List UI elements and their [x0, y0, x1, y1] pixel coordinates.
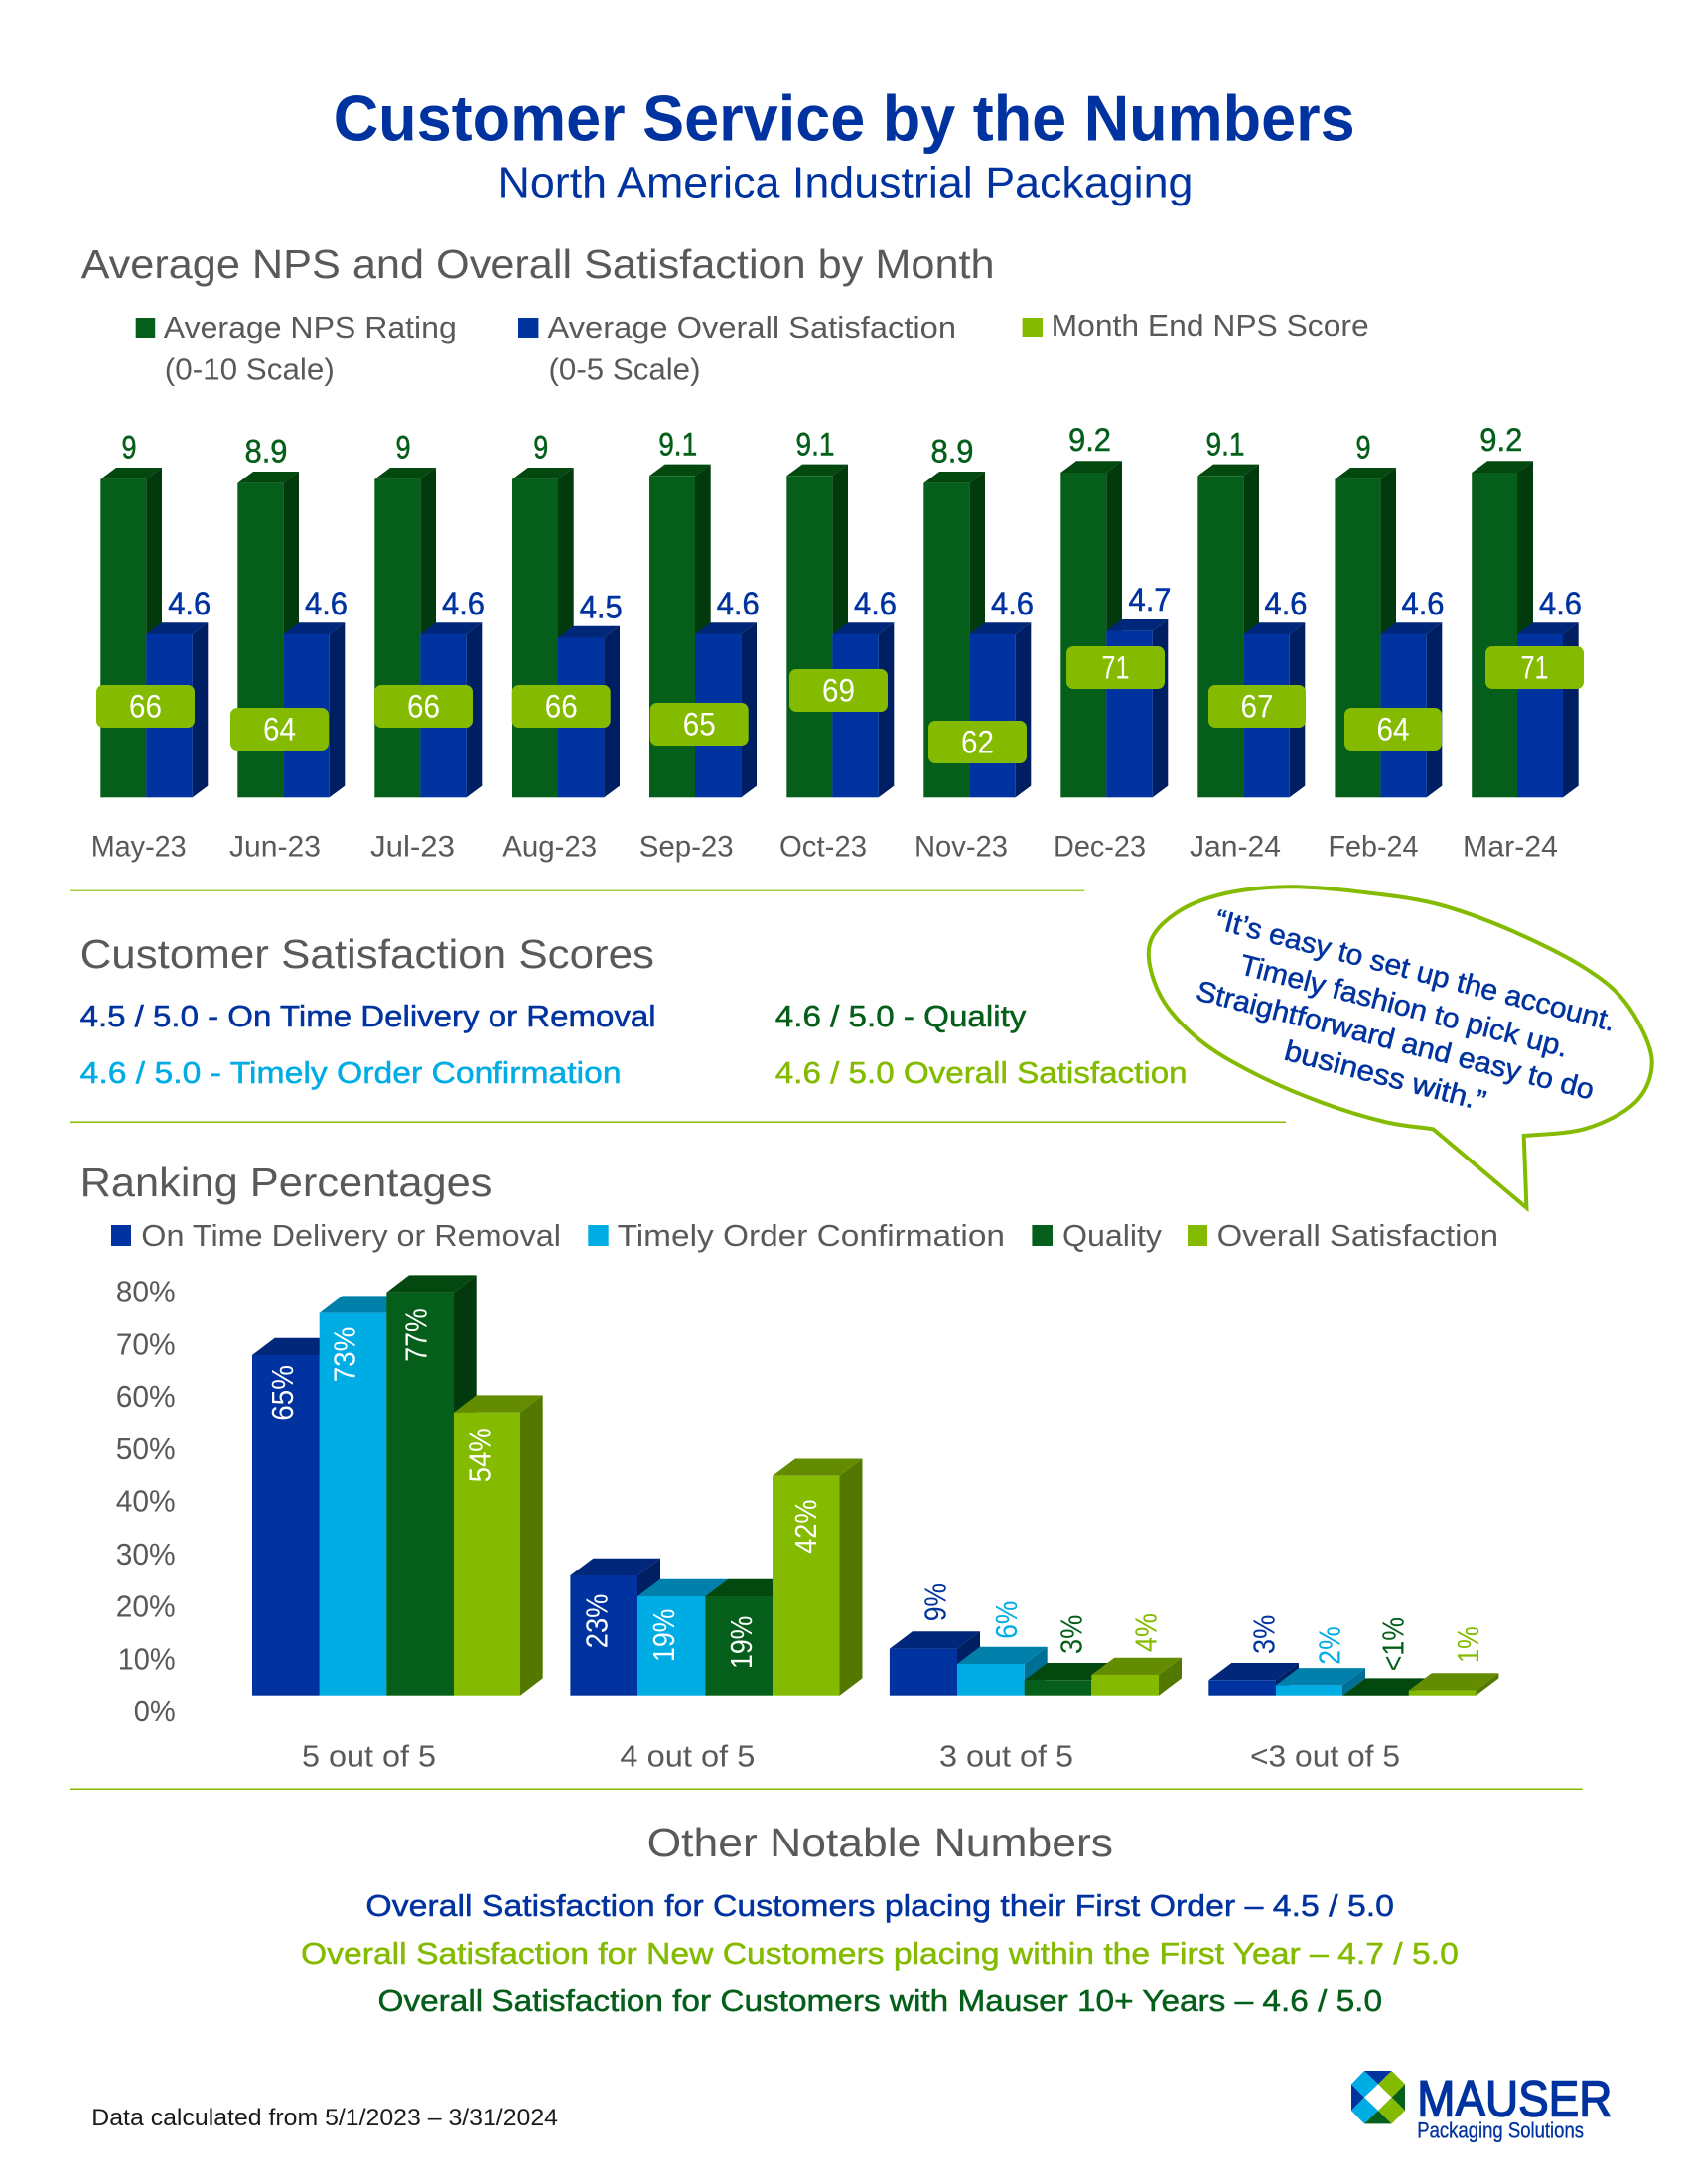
- month group: Sep-23: 9.1: [658, 426, 697, 462]
- bar group: less than 3 out of 5: 1%: [1451, 1626, 1485, 1663]
- bar group: less than 3 out of 5: 2%: [1313, 1626, 1346, 1665]
- month group: Aug-23: 4.5: [580, 590, 623, 625]
- month group: Oct-23: 69: [822, 673, 855, 709]
- month group: Nov-23: 4.6: [991, 586, 1034, 621]
- bar group: 3 out of 5: 3 out of 5: [939, 1738, 1073, 1773]
- month group: Mar-24: 9.2: [1479, 422, 1522, 458]
- month group: Jan-24: 4.6: [1265, 586, 1307, 621]
- bar group: less than 3 out of 5: <1%: [1376, 1617, 1410, 1671]
- bar group: 5 out of 5: 65%: [265, 1365, 300, 1421]
- month group: May-23: May-23: [91, 831, 187, 864]
- stat: customers with Mauser 10+ years: Overall Satisfaction for Customers with Mauser 10+ Years – 4.6 / 5.0: [377, 1983, 1382, 2018]
- month group: Nov-23: 8.9: [931, 434, 973, 470]
- y axis labels: 30%: [116, 1537, 176, 1571]
- heading: customer satisfaction scores: Customer Satisfaction Scores: [80, 931, 654, 977]
- callout: customer quote speech bubble: [1149, 887, 1652, 1208]
- quote text: business with.”: [1281, 1035, 1489, 1118]
- month group: May-23: [91, 430, 211, 864]
- month group: May-23: 4.6: [168, 586, 211, 621]
- month group: Oct-23: Oct-23: [779, 831, 867, 864]
- month group: Nov-23: [914, 434, 1034, 864]
- month group: Feb-24: Feb-24: [1329, 831, 1418, 864]
- y axis labels: 20%: [116, 1589, 176, 1624]
- month group: Dec-23: 4.7: [1128, 582, 1172, 617]
- logo wordmark: MAUSER: [1417, 2071, 1612, 2127]
- month group: Dec-23: Dec-23: [1054, 831, 1146, 864]
- bar group: 3 out of 5: [890, 1583, 1182, 1773]
- month group: Jun-23: 64: [263, 712, 296, 748]
- month group: Jul-23: 66: [407, 689, 440, 725]
- month group: Mar-24: 4.6: [1539, 586, 1582, 621]
- subtitle: North America Industrial Packaging: [498, 158, 1194, 206]
- legend item: month end NPS score: Month End NPS Score: [1052, 308, 1369, 342]
- month group: Jul-23: Jul-23: [370, 831, 455, 864]
- month group: Jan-24: 9.1: [1205, 426, 1245, 462]
- quote text: “It’s easy to set up the account.: [1211, 904, 1618, 1038]
- month group: Jun-23: 8.9: [244, 434, 288, 470]
- stat: first order: Overall Satisfaction for Customers placing their First Order – 4.5 / 5.0: [365, 1888, 1394, 1923]
- panel: other notable numbers lines: [301, 1888, 1459, 2018]
- month group: Nov-23: Nov-23: [914, 831, 1008, 864]
- month group: Oct-23: 9.1: [796, 426, 834, 462]
- quote text: Timely fashion to pick up.: [1236, 949, 1572, 1064]
- month group: Mar-24: [1463, 422, 1584, 864]
- y axis labels: 60%: [116, 1379, 176, 1414]
- month group: Aug-23: 9: [533, 430, 548, 466]
- legend: monthly chart: [136, 308, 1369, 387]
- month group: Jan-24: 67: [1241, 689, 1273, 725]
- month group: Feb-24: 9: [1356, 430, 1370, 466]
- y axis labels: 80%: [116, 1275, 176, 1309]
- y axis labels: [116, 1275, 176, 1728]
- bar group: 4 out of 5: 4 out of 5: [620, 1738, 755, 1773]
- month group: Oct-23: [779, 426, 897, 864]
- month group: Dec-23: 71: [1102, 650, 1130, 686]
- bar group: 5 out of 5: 73%: [327, 1327, 361, 1382]
- month group: Jul-23: [370, 430, 485, 864]
- quote text: [1193, 904, 1618, 1118]
- bar group: 4 out of 5: 23%: [579, 1594, 614, 1648]
- month group: Mar-24: Mar-24: [1463, 831, 1558, 864]
- bar group: 4 out of 5: 42%: [788, 1500, 823, 1554]
- heading: ranking percentages: Ranking Percentages: [80, 1160, 492, 1205]
- legend item: average NPS rating: Average NPS Rating: [164, 310, 457, 344]
- month group: Sep-23: [639, 426, 760, 864]
- bar group: 3 out of 5: 6%: [989, 1601, 1024, 1639]
- panel: satisfaction score lines: [80, 999, 1188, 1090]
- legend item: average overall satisfaction: Average Overall Satisfaction: [548, 310, 956, 344]
- chart: ranking percentages bars: [252, 1275, 1498, 1773]
- y axis labels: 70%: [116, 1326, 176, 1361]
- month group: Feb-24: [1329, 430, 1444, 864]
- month group: Dec-23: [1054, 422, 1172, 864]
- icon: logo octagon: [1351, 2071, 1405, 2123]
- legend item: average NPS rating: [136, 310, 457, 387]
- y axis labels: 40%: [116, 1483, 176, 1519]
- month group: Aug-23: Aug-23: [502, 831, 597, 864]
- y axis labels: 50%: [116, 1432, 176, 1466]
- legend item: average overall satisfaction: (0-5 Scale): [548, 352, 701, 387]
- bar group: less than 3 out of 5: [1208, 1615, 1498, 1773]
- score: on time delivery: 4.5 / 5.0 - On Time Delivery or Removal: [80, 999, 656, 1033]
- month group: Nov-23: 62: [961, 725, 994, 760]
- score: quality: 4.6 / 5.0 - Quality: [775, 999, 1027, 1033]
- title: Customer Service by the Numbers: [334, 82, 1355, 155]
- month group: Aug-23: 66: [545, 689, 578, 725]
- quote text: Straightforward and easy to do: [1193, 975, 1598, 1107]
- chart: monthly NPS and satisfaction bars: [91, 422, 1584, 864]
- bar group: less than 3 out of 5: 3%: [1246, 1615, 1281, 1654]
- logo: Mauser Packaging Solutions: [1351, 2071, 1612, 2142]
- footnote: data range: Data calculated from 5/1/2023 – 3/31/2024: [91, 2105, 558, 2131]
- bar group: 3 out of 5: 4%: [1128, 1613, 1163, 1652]
- month group: Jun-23: [229, 434, 348, 864]
- month group: Jun-23: Jun-23: [229, 831, 321, 864]
- month group: Oct-23: 4.6: [854, 586, 897, 621]
- y axis labels: 0%: [134, 1694, 176, 1728]
- month group: Feb-24: 4.6: [1402, 586, 1444, 621]
- month group: Jun-23: 4.6: [305, 586, 348, 621]
- bar group: 4 out of 5: 19%: [724, 1616, 759, 1669]
- month group: Sep-23: Sep-23: [639, 831, 734, 864]
- bar group: 5 out of 5: [252, 1275, 543, 1773]
- bar group: 5 out of 5: 77%: [398, 1308, 433, 1362]
- bar group: 3 out of 5: 3%: [1054, 1615, 1088, 1654]
- bar group: 4 out of 5: 19%: [646, 1609, 681, 1662]
- month group: Jul-23: 9: [395, 430, 411, 466]
- month group: May-23: 66: [129, 689, 162, 725]
- bar group: less than 3 out of 5: <3 out of 5: [1250, 1738, 1400, 1773]
- month group: Jan-24: Jan-24: [1190, 831, 1281, 864]
- month group: Sep-23: 4.6: [717, 586, 760, 621]
- bar group: 5 out of 5: 5 out of 5: [302, 1738, 436, 1773]
- legend item: average overall satisfaction: [518, 310, 956, 387]
- legend: ranking chart: [111, 1218, 1498, 1253]
- score: timely order confirmation: 4.6 / 5.0 - Timely Order Confirmation: [80, 1055, 622, 1090]
- month group: Dec-23: 9.2: [1068, 422, 1111, 458]
- month group: Aug-23: [502, 430, 623, 864]
- logo tagline: Packaging Solutions: [1417, 2117, 1584, 2142]
- month group: Sep-23: 65: [683, 707, 716, 743]
- y axis labels: 10%: [118, 1641, 176, 1676]
- legend item: quality: Quality: [1062, 1218, 1163, 1253]
- legend item: average NPS rating: (0-10 Scale): [165, 352, 335, 387]
- month group: May-23: 9: [121, 430, 137, 466]
- legend item: timely order confirmation: Timely Order Confirmation: [618, 1218, 1005, 1253]
- stat: new customers: Overall Satisfaction for New Customers placing within the First Year – 4.7 / 5.0: [301, 1936, 1459, 1971]
- legend item: on time delivery or removal: On Time Delivery or Removal: [141, 1218, 561, 1253]
- heading: other notable numbers: Other Notable Numbers: [647, 1820, 1113, 1865]
- heading: average NPS and overall satisfaction by month: Average NPS and Overall Satisfaction by Month: [81, 241, 995, 287]
- score: overall satisfaction: 4.6 / 5.0 Overall Satisfaction: [775, 1055, 1188, 1090]
- month group: Jan-24: [1190, 426, 1307, 864]
- bar group: 3 out of 5: 9%: [918, 1583, 953, 1621]
- month group: Jul-23: 4.6: [442, 586, 485, 621]
- bar group: 4 out of 5: [570, 1459, 862, 1773]
- month group: Feb-24: 64: [1376, 712, 1410, 748]
- legend item: overall satisfaction: Overall Satisfaction: [1217, 1218, 1498, 1253]
- bar group: 5 out of 5: 54%: [462, 1428, 496, 1482]
- month group: Mar-24: 71: [1521, 650, 1549, 686]
